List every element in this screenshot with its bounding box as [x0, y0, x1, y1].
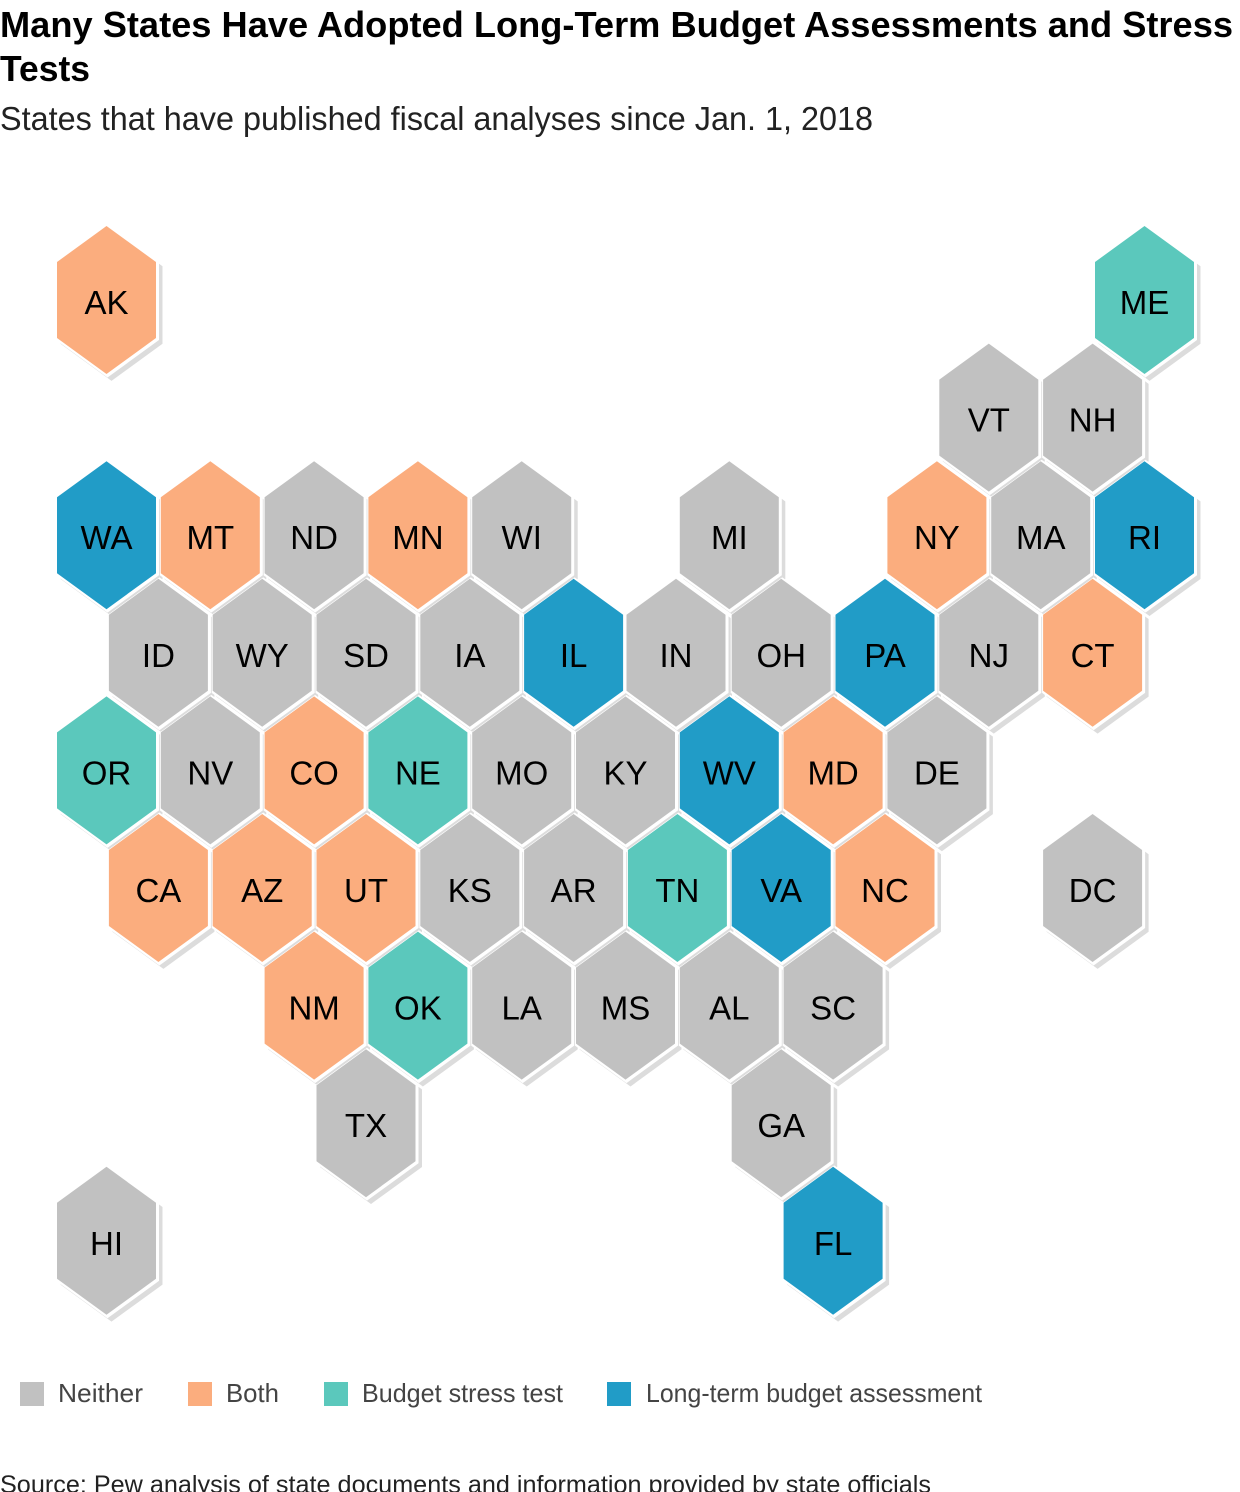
state: KS: [420, 814, 524, 967]
state: AK: AK: [84, 284, 129, 321]
state: AR: [524, 814, 628, 967]
state: MO: [472, 696, 576, 849]
state: CO: [265, 696, 369, 849]
state: PA: [836, 579, 940, 732]
title: Many States Have Adopted Long-Term Budget Assessments and Stress: [0, 4, 1233, 45]
state: OH: [732, 579, 836, 732]
legend: [20, 1378, 983, 1408]
state: TN: TN: [655, 872, 699, 909]
state: MN: [368, 461, 472, 614]
state: HI: [57, 1167, 161, 1320]
state: ND: [265, 461, 369, 614]
state: SD: [316, 579, 420, 732]
state: UT: UT: [344, 872, 388, 909]
state: TX: [316, 1049, 420, 1202]
state: VA: [732, 814, 836, 967]
state: MA: MA: [1016, 519, 1065, 556]
state: TN: [628, 814, 732, 967]
state: ND: ND: [290, 519, 338, 556]
state: IA: [420, 579, 524, 732]
state: NM: [265, 932, 369, 1085]
state: KY: KY: [603, 754, 648, 791]
state: IL: [524, 579, 628, 732]
state: FL: FL: [814, 1225, 852, 1262]
state: IN: [626, 579, 730, 732]
state: AL: AL: [709, 990, 749, 1027]
state: HI: HI: [90, 1225, 123, 1262]
state: KS: KS: [448, 872, 492, 909]
state: NY: [887, 461, 991, 614]
state: CA: CA: [135, 872, 181, 909]
state: IN: IN: [660, 637, 692, 674]
state: OK: [368, 932, 472, 1085]
state: WV: WV: [703, 754, 756, 791]
state: NC: [836, 814, 940, 967]
state: VT: VT: [968, 402, 1010, 439]
state: ID: [109, 579, 213, 732]
subtitle: States that have published fiscal analyses since Jan. 1, 2018: [0, 100, 873, 137]
state: MI: MI: [711, 519, 748, 556]
legend item: Both: [188, 1378, 279, 1408]
state: NJ: [939, 579, 1043, 732]
state: NE: [368, 696, 472, 849]
state: WA: WA: [81, 519, 132, 556]
state: NJ: NJ: [969, 637, 1009, 674]
hexagon tile map of states: [57, 226, 1199, 1320]
title: [0, 4, 1233, 89]
state: WI: WI: [502, 519, 542, 556]
state: DE: [887, 696, 991, 849]
state: CT: [1043, 579, 1147, 732]
state: OK: OK: [394, 990, 442, 1027]
state: OR: [57, 696, 161, 849]
state: VA: VA: [760, 872, 802, 909]
state: NH: NH: [1069, 402, 1116, 439]
state: SC: [784, 932, 888, 1085]
legend item: Neither: Neither: [58, 1378, 143, 1408]
state: CA: [109, 814, 213, 967]
state: GA: GA: [757, 1107, 805, 1144]
state: WV: [680, 696, 784, 849]
title: Tests: [0, 48, 90, 89]
state: ID: ID: [142, 637, 175, 674]
state: CO: CO: [289, 754, 339, 791]
state: NC: NC: [861, 872, 909, 909]
state: RI: RI: [1128, 519, 1161, 556]
state: NM: NM: [288, 990, 340, 1027]
state: ME: [1095, 226, 1199, 379]
state: LA: LA: [502, 990, 542, 1027]
state: LA: [472, 932, 576, 1085]
state: UT: [316, 814, 420, 967]
state: MS: [576, 932, 680, 1085]
state: GA: [732, 1049, 836, 1202]
state: TX: TX: [345, 1107, 387, 1144]
state: NH: [1043, 344, 1147, 497]
state: OR: OR: [82, 754, 131, 791]
state: WY: WY: [236, 637, 289, 674]
state: WY: [213, 579, 317, 732]
state: WA: [57, 461, 161, 614]
state: MN: MN: [392, 519, 444, 556]
state: NE: NE: [395, 754, 441, 791]
state: NV: [161, 696, 265, 849]
state: NY: NY: [914, 519, 960, 556]
state: IA: IA: [454, 637, 485, 674]
state: FL: [784, 1167, 888, 1320]
legend item: Long-term budget assessment: Long-term budget assessment: [646, 1378, 983, 1408]
state: DE: DE: [914, 754, 960, 791]
legend item: Budget stress test: Budget stress test: [362, 1378, 564, 1408]
state: ME: ME: [1120, 284, 1169, 321]
state: SC: SC: [810, 990, 856, 1027]
state: MD: MD: [807, 754, 859, 791]
state: MO: MO: [495, 754, 548, 791]
legend item: Both: Both: [226, 1378, 279, 1408]
state: VT: [939, 344, 1043, 497]
state: MT: [161, 461, 265, 614]
state: RI: [1095, 461, 1199, 614]
legend item: Neither: [20, 1378, 143, 1408]
state: PA: PA: [864, 637, 906, 674]
state: KY: [576, 696, 680, 849]
state: OH: OH: [756, 637, 806, 674]
state: AZ: [213, 814, 317, 967]
state: MI: [680, 461, 784, 614]
state: AL: [680, 932, 784, 1085]
state: SD: SD: [343, 637, 389, 674]
state: AR: AR: [551, 872, 597, 909]
state: AK: [57, 226, 161, 379]
state: MS: MS: [601, 990, 650, 1027]
state: WI: [472, 461, 576, 614]
state: DC: [1043, 814, 1147, 967]
state: MA: [991, 461, 1095, 614]
state: AZ: AZ: [241, 872, 283, 909]
state: MD: [784, 696, 888, 849]
state: MT: MT: [186, 519, 234, 556]
state: IL: IL: [560, 637, 587, 674]
state: CT: CT: [1071, 637, 1115, 674]
state: NV: NV: [187, 754, 233, 791]
state: DC: DC: [1069, 872, 1116, 909]
